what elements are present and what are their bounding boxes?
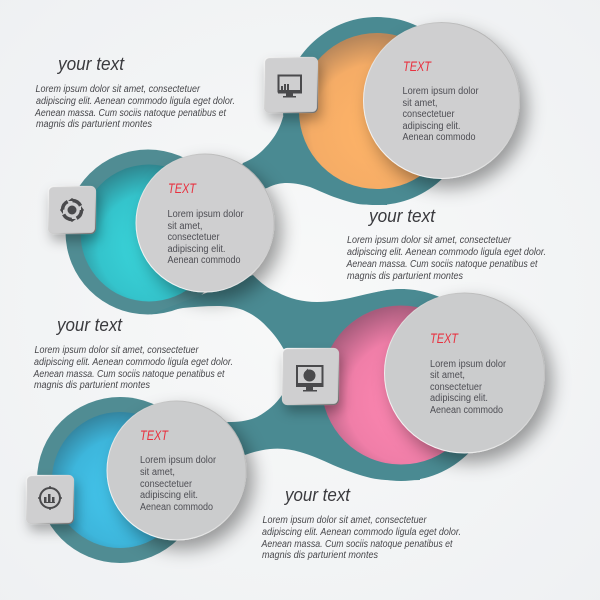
panel: pink gray disc: consectetuer xyxy=(430,382,483,393)
text block: middle right: adipiscing elit. Aenean commodo ligula eget dolor. xyxy=(347,247,546,258)
text block: middle right: your text xyxy=(367,206,436,226)
panel: cyan gray disc xyxy=(136,154,274,292)
panel: pink gray disc: adipiscing elit. xyxy=(430,393,488,404)
text block: middle right: Aenean massa. Cum sociis natoque penatibus et xyxy=(346,259,539,270)
text block: top left: your text xyxy=(56,54,125,74)
text block: middle left: magnis dis parturient montes xyxy=(34,380,150,391)
panel: blue gray disc: Lorem ipsum dolor xyxy=(140,455,217,466)
text block: top left: adipiscing elit. Aenean commodo ligula eget dolor. xyxy=(36,96,235,107)
icon: target with bar chart xyxy=(26,476,74,524)
panel: orange gray disc: consectetuer xyxy=(402,109,455,120)
icon: monitor with pie chart xyxy=(282,348,338,404)
text block: middle right xyxy=(346,206,546,282)
cyan inner circle xyxy=(80,164,218,302)
panel: cyan gray disc: Aenean commodo xyxy=(168,255,241,266)
text block: top left: Aenean massa. Cum sociis natoque penatibus et xyxy=(34,108,227,119)
panel: blue gray disc: Aenean commodo xyxy=(140,502,213,513)
pink inner circle xyxy=(322,306,480,464)
blue inner circle xyxy=(52,412,188,548)
panel: pink gray disc: sit amet, xyxy=(430,370,465,381)
panel: cyan gray disc: Lorem ipsum dolor xyxy=(168,209,244,220)
panel: blue gray disc: consectetuer xyxy=(140,479,193,490)
text block: bottom right: magnis dis parturient montes xyxy=(262,550,378,561)
panel: orange gray disc: adipiscing elit. xyxy=(402,121,460,132)
text block: bottom right: adipiscing elit. Aenean commodo ligula eget dolor. xyxy=(262,527,461,538)
panel: blue gray disc xyxy=(107,401,246,540)
text block: middle left: Aenean massa. Cum sociis natoque penatibus et xyxy=(33,369,226,380)
panel: orange gray disc: sit amet, xyxy=(402,98,438,109)
panel: blue gray disc: adipiscing elit. xyxy=(140,490,198,501)
text block: middle left: your text xyxy=(55,315,123,335)
text block: middle left xyxy=(33,315,233,391)
text block: top left xyxy=(34,54,235,130)
orange inner circle xyxy=(299,33,455,189)
text block: bottom right: Lorem ipsum dolor sit amet, consectetuer xyxy=(262,515,427,526)
panel: pink gray disc: TEXT xyxy=(430,330,459,346)
panel: orange gray disc xyxy=(364,22,520,178)
text block: middle left: adipiscing elit. Aenean commodo ligula eget dolor. xyxy=(34,357,233,368)
panel: orange gray disc: Lorem ipsum dolor xyxy=(402,86,479,97)
text block: bottom right xyxy=(261,485,461,561)
panel: cyan gray disc: sit amet, xyxy=(168,221,202,232)
panel: cyan gray disc: TEXT xyxy=(168,180,197,196)
text block: bottom right: your text xyxy=(283,485,351,505)
text block: top left: magnis dis parturient montes xyxy=(36,119,152,130)
text block: top left: Lorem ipsum dolor sit amet, consectetuer xyxy=(36,84,201,95)
panel: cyan gray disc: adipiscing elit. xyxy=(168,244,226,255)
text block: middle left: Lorem ipsum dolor sit amet, consectetuer xyxy=(34,345,199,356)
icon: monitor with bar chart xyxy=(264,58,318,112)
panel: orange gray disc: TEXT xyxy=(403,58,432,74)
panel: pink gray disc xyxy=(384,293,544,453)
panel: blue gray disc: sit amet, xyxy=(140,467,175,478)
teal connected ring shape xyxy=(37,17,497,563)
panel: cyan gray disc: consectetuer xyxy=(168,232,220,243)
panel: pink gray disc: Aenean commodo xyxy=(430,405,503,416)
text block: middle right: magnis dis parturient montes xyxy=(347,271,463,282)
text block: middle right: Lorem ipsum dolor sit amet, consectetuer xyxy=(347,235,512,246)
panel: pink gray disc: Lorem ipsum dolor xyxy=(430,359,507,370)
icon: eye with four circular arrows xyxy=(48,186,96,234)
panel: orange gray disc: Aenean commodo xyxy=(402,132,476,143)
text block: bottom right: Aenean massa. Cum sociis natoque penatibus et xyxy=(261,539,454,550)
panel: blue gray disc: TEXT xyxy=(140,427,169,443)
